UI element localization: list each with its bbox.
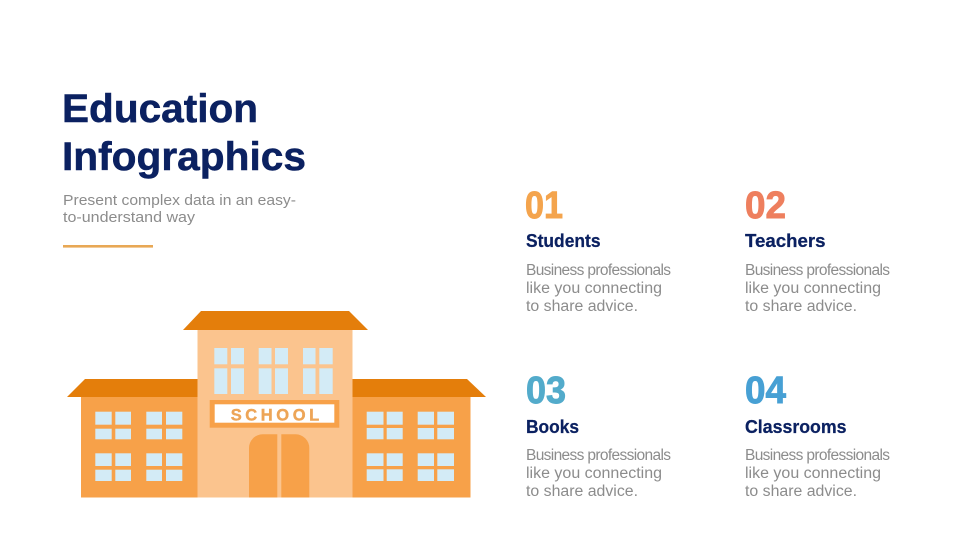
item 01: students: to share advice. bbox=[526, 298, 638, 315]
item 04: classrooms bbox=[745, 370, 890, 500]
right wing bbox=[352, 379, 486, 498]
subtitle bbox=[63, 192, 296, 226]
item 04: classrooms: Business professionals bbox=[745, 447, 890, 464]
item 02: teachers: like you connecting bbox=[745, 280, 881, 297]
item 02: teachers: Business professionals bbox=[745, 262, 890, 279]
item 01: students: Business professionals bbox=[526, 262, 671, 279]
item 03: books: 03 bbox=[526, 370, 566, 412]
central tower bbox=[183, 311, 368, 498]
item 03: books: Books bbox=[526, 416, 579, 437]
item 03: books bbox=[526, 370, 671, 500]
school sign bbox=[210, 400, 339, 428]
item 02: teachers: Teachers bbox=[745, 230, 826, 251]
left wing bbox=[67, 379, 198, 498]
item 04: classrooms: to share advice. bbox=[745, 483, 857, 500]
door bbox=[249, 434, 309, 498]
item 01: students bbox=[525, 185, 671, 315]
item 04: classrooms: 04 bbox=[745, 370, 786, 412]
item 03: books: to share advice. bbox=[526, 483, 638, 500]
item 02: teachers: to share advice. bbox=[745, 298, 857, 315]
item 02: teachers: 02 bbox=[745, 185, 786, 227]
item 01: students: like you connecting bbox=[526, 280, 662, 297]
title bbox=[62, 87, 306, 179]
accent rule bbox=[63, 245, 153, 248]
school sign: SCHOOL bbox=[231, 406, 319, 424]
title: Infographics bbox=[62, 135, 306, 179]
illustration: school building bbox=[67, 311, 486, 498]
subtitle: Present complex data in an easy- bbox=[63, 192, 296, 209]
item 02: teachers bbox=[745, 185, 890, 315]
item 04: classrooms: Classrooms bbox=[745, 416, 846, 437]
item 03: books: Business professionals bbox=[526, 447, 671, 464]
item 03: books: like you connecting bbox=[526, 465, 662, 482]
title: Education bbox=[62, 87, 258, 131]
item 01: students: Students bbox=[526, 230, 600, 251]
item 04: classrooms: like you connecting bbox=[745, 465, 881, 482]
subtitle: to-understand way bbox=[63, 209, 196, 226]
item 01: students: 01 bbox=[525, 185, 563, 227]
